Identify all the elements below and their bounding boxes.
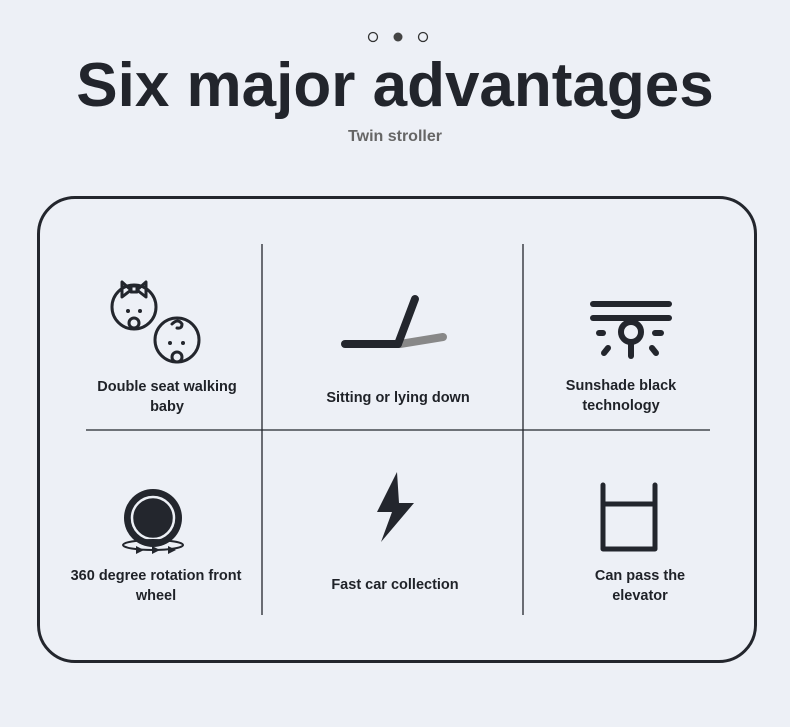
label: elevator	[595, 568, 685, 604]
label: sunshade: technology	[582, 398, 660, 414]
label: sunshade: Sunshade black	[566, 378, 676, 394]
icon: lightning	[377, 472, 414, 542]
subtitle: Twin stroller	[348, 128, 442, 145]
label: fast: Fast car collection	[331, 577, 459, 593]
label: elevator: elevator	[612, 588, 668, 604]
icon: reclining seat	[341, 295, 447, 348]
label: sunshade	[566, 378, 676, 414]
label: sitting: Sitting or lying down	[326, 390, 470, 406]
icon: sunshade	[590, 301, 672, 359]
icon: twin babies	[110, 280, 200, 364]
title: Six major advantages	[76, 51, 714, 120]
label: wheel: 360 degree rotation front	[71, 568, 241, 584]
label: double seat: baby	[150, 399, 184, 415]
label: wheel: wheel	[136, 588, 176, 604]
label: elevator: Can pass the	[595, 568, 685, 584]
label: double seat: Double seat walking	[97, 379, 237, 395]
pagination dots	[368, 32, 428, 42]
panel: advantages grid	[37, 196, 757, 663]
icon: wheel	[122, 489, 184, 554]
label: double seat	[97, 379, 237, 415]
icon: elevator	[600, 482, 658, 552]
label: wheel	[71, 568, 242, 604]
